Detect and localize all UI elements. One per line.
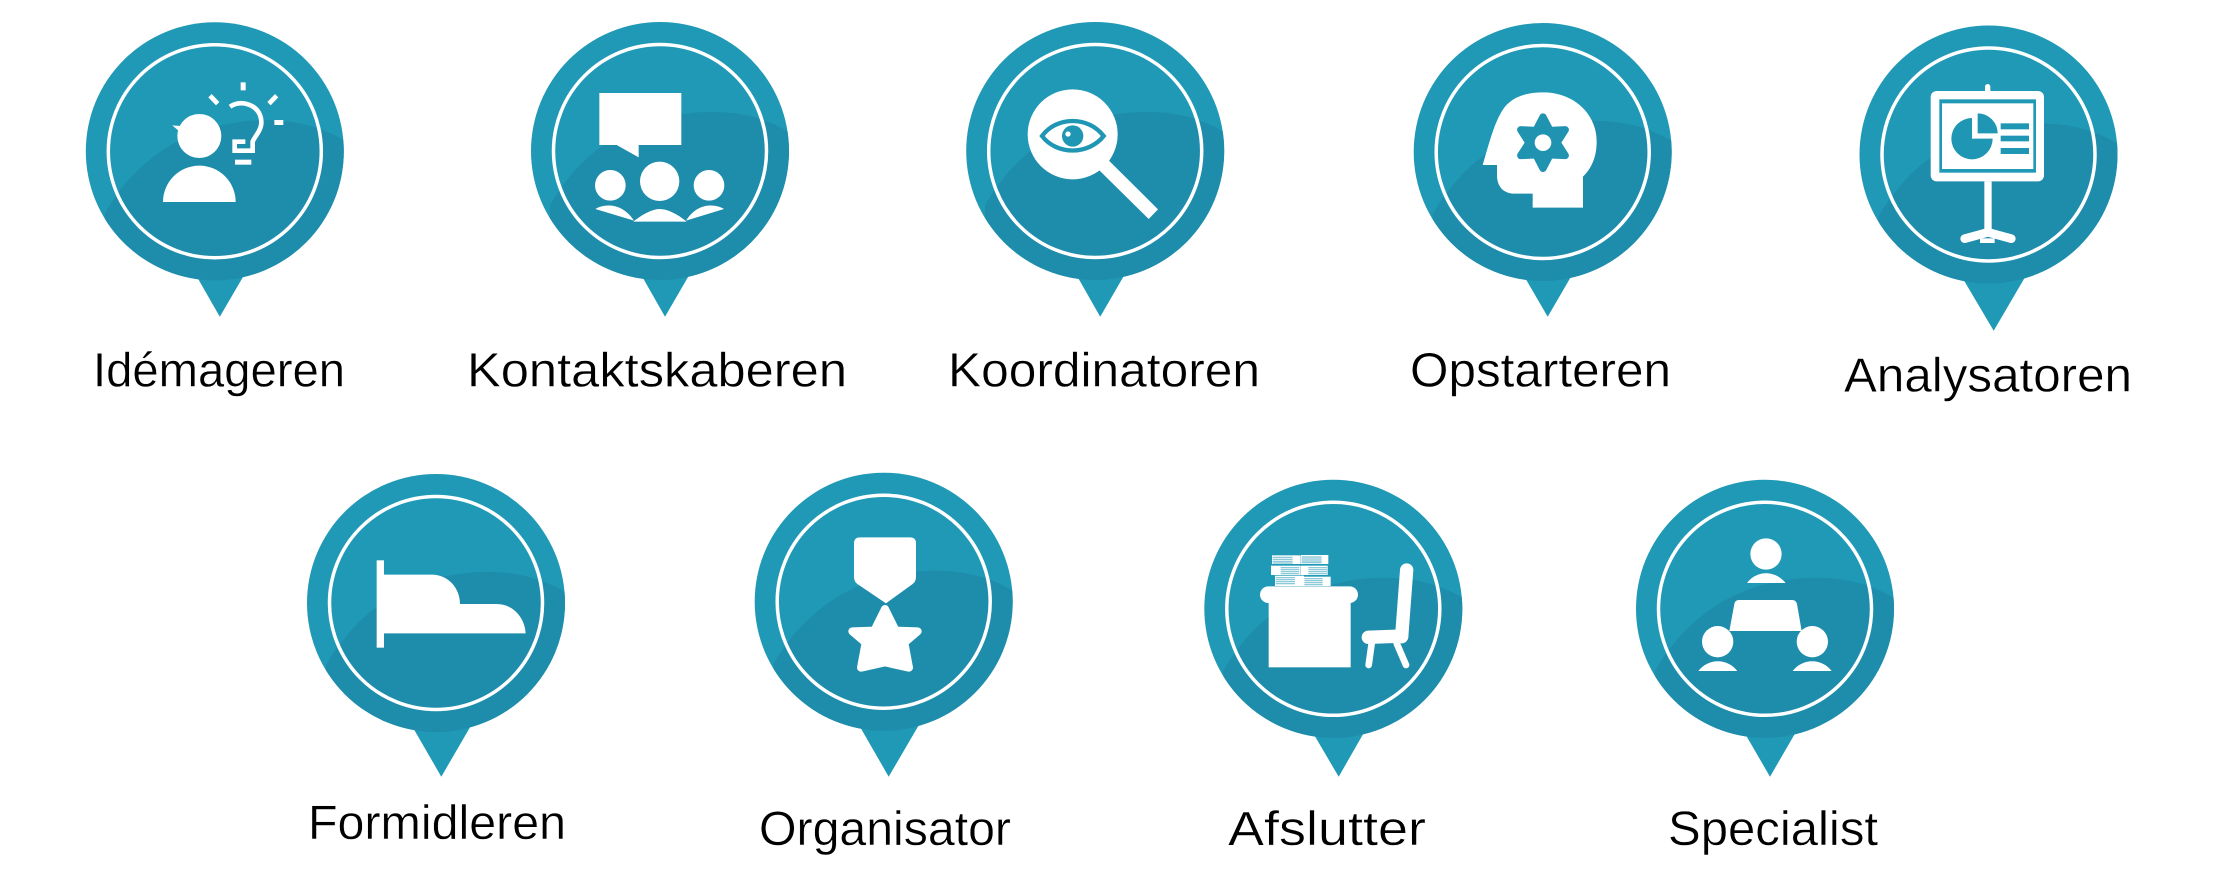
icon: three people around a table [1698,538,1832,671]
icon: desk, books and chair [1260,555,1407,667]
pin: Afslutter [1204,480,1468,856]
pin bubble [1636,480,1900,777]
icon: magnifier with eye [1028,89,1158,219]
pin: Koordinatoren [948,22,1260,398]
label: Analysatoren [1844,349,2132,403]
icon: head with gear [1483,92,1597,208]
pin: Formidleren [307,474,571,850]
icon: flag [377,560,526,648]
pin bubble [755,473,1019,777]
pin bubble [1860,26,2124,331]
pin bubble [1414,23,1678,317]
label: Formidleren [308,796,566,850]
icon: presentation board with pie chart [1931,84,2044,243]
pin bubble [86,22,350,317]
icon: medal with star [852,537,918,668]
label: Idémageren [93,344,345,398]
pin bubble [531,22,795,317]
pin bubble [307,474,571,777]
label: Opstarteren [1410,344,1671,398]
label: Afslutter [1228,802,1426,856]
icon: person with light bulb [163,82,283,202]
pin: Idémageren [86,22,350,398]
label: Kontaktskaberen [467,344,847,398]
pin bubble [1204,480,1468,777]
pin: Kontaktskaberen [467,22,847,398]
label: Koordinatoren [948,344,1260,398]
pin: Opstarteren [1410,23,1678,398]
pin: Specialist [1636,480,1900,856]
icon: people with speech bubble [595,93,724,222]
pin: Analysatoren [1844,26,2132,403]
label: Specialist [1668,802,1879,856]
pin: Organisator [755,473,1019,856]
label: Organisator [759,802,1011,856]
pin bubble [966,22,1230,317]
